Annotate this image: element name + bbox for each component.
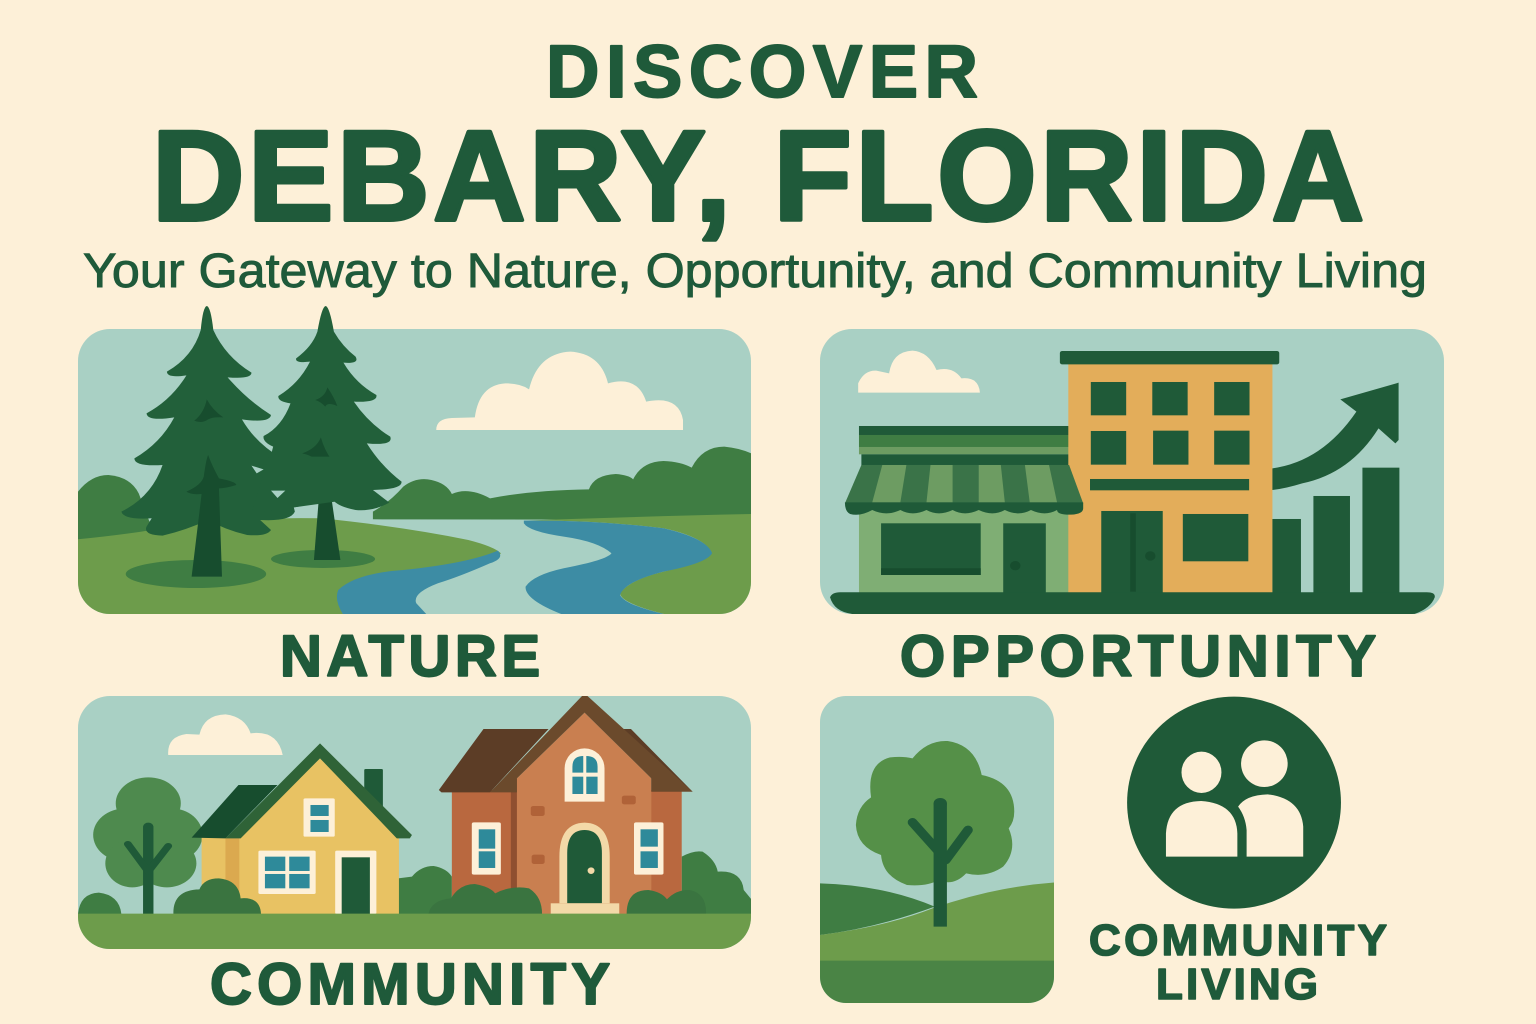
right meadow — [525, 514, 755, 615]
front bushes — [173, 878, 706, 914]
subtitle: Your Gateway to Nature, Opportunity, and Community Living — [83, 245, 1427, 298]
left bush — [78, 475, 154, 540]
shop window — [881, 523, 981, 575]
icon: pine tree left — [121, 306, 347, 588]
label: nature: NATURE — [280, 624, 540, 689]
icon: cloud — [858, 351, 980, 393]
distant hills — [373, 447, 755, 520]
label: community living — [1089, 916, 1387, 1009]
ground — [830, 592, 1435, 614]
left meadow — [78, 518, 501, 615]
icon: community people circle — [1127, 697, 1341, 909]
building windows and door — [1090, 382, 1250, 594]
icon: brick house — [439, 693, 693, 914]
label: opportunity: OPPORTUNITY — [900, 624, 1376, 689]
icon: striped awning — [845, 465, 1083, 515]
shop door — [1003, 523, 1046, 595]
label: community: COMMUNITY — [210, 952, 610, 1017]
icon: left tree — [93, 777, 202, 914]
bushes behind — [78, 851, 755, 914]
panel: community scene — [78, 693, 755, 954]
title: DeBary, Florida: DEBARY, FLORIDA — [152, 105, 1364, 248]
label: community living: COMMUNITY — [1089, 916, 1387, 965]
panel: tree scene — [820, 693, 1057, 1007]
hill front — [820, 882, 1057, 962]
icon: pine tree right — [263, 306, 402, 568]
icon: growth arrow — [1272, 383, 1399, 490]
bar chart — [1272, 468, 1399, 596]
panel: nature scene — [78, 306, 755, 617]
office building — [1060, 351, 1279, 593]
hill back — [820, 883, 935, 935]
panel: opportunity scene — [820, 327, 1447, 620]
river far bank — [524, 521, 712, 615]
icon: tree — [856, 741, 1014, 927]
river near bank — [337, 551, 500, 615]
label: community living: LIVING — [1156, 960, 1318, 1009]
icon: cloud — [168, 714, 283, 755]
shop wall — [859, 510, 1069, 593]
ground — [78, 914, 751, 949]
ground band — [820, 961, 1057, 1007]
icon: yellow house — [192, 743, 412, 914]
title: Discover: DISCOVER — [546, 30, 978, 113]
shop roof — [859, 426, 1069, 465]
icon: cloud — [436, 352, 683, 430]
